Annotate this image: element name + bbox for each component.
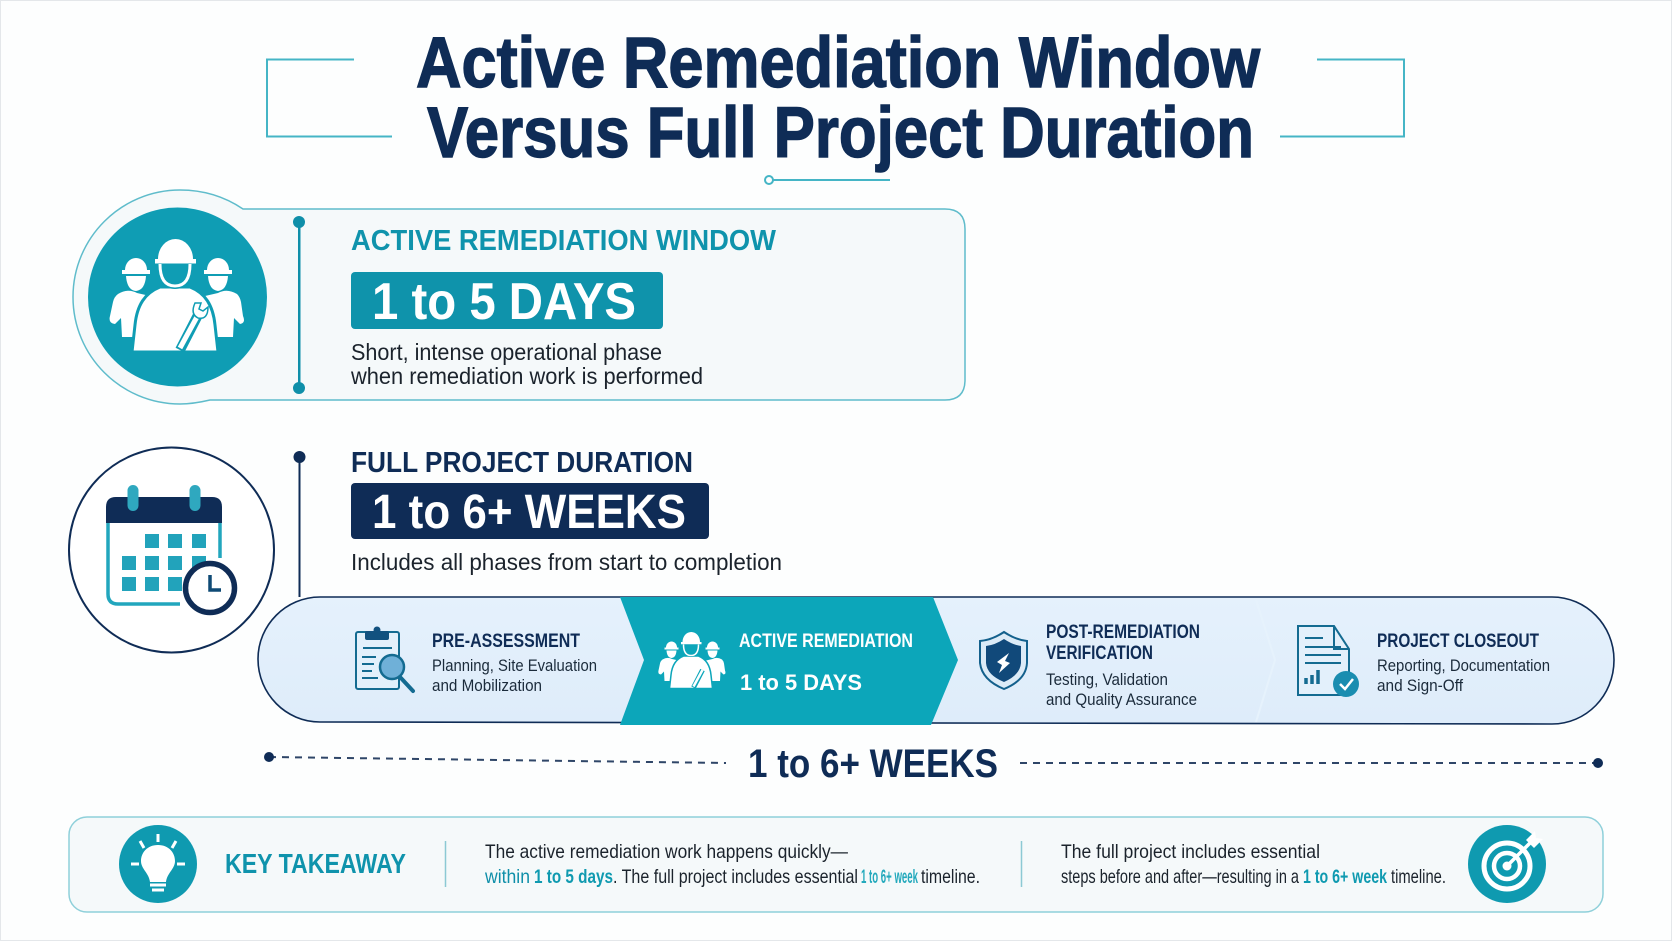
phase: project closeout: PROJECT CLOSEOUT <box>1377 631 1539 652</box>
takeaway text left: 1 to 6+ week <box>861 866 918 888</box>
icon: light bulb <box>119 825 197 903</box>
phase: pre-assessment: and Mobilization <box>432 676 542 695</box>
phase: post-remediation verification: VERIFICATION <box>1046 643 1153 664</box>
icon: workers <box>88 208 267 386</box>
takeaway text right: 1 to 6+ week <box>1303 866 1387 888</box>
takeaway text right: The full project includes essential <box>1061 841 1320 863</box>
phase: project closeout: Reporting, Documentation <box>1377 656 1550 675</box>
phase: post-remediation verification: and Quality Assurance <box>1046 690 1197 709</box>
phase: post-remediation verification: Testing, Validation <box>1046 670 1168 689</box>
icon: workers small <box>658 632 726 688</box>
duration arrow: 1 to 6+ weeks: 1 to 6+ WEEKS <box>748 742 998 786</box>
panel: phase timeline bar <box>258 597 1614 725</box>
badge: 1 to 6+ weeks: 1 to 6+ WEEKS <box>372 486 686 539</box>
icon: document with check <box>1298 626 1359 697</box>
duration arrow: 1 to 6+ weeks <box>264 742 1603 786</box>
phase: active remediation: 1 to 5 DAYS <box>740 670 862 695</box>
phase: post-remediation verification: POST-REMEDIATION <box>1046 622 1200 643</box>
badge: 1 to 5 days: 1 to 5 DAYS <box>372 273 636 331</box>
heading: ACTIVE REMEDIATION WINDOW <box>351 225 777 257</box>
takeaway text left: timeline. <box>921 866 980 888</box>
panel: active remediation window <box>73 190 965 404</box>
takeaway text left: . The full project includes essential <box>613 866 858 888</box>
description: full project: Includes all phases from start to completion <box>351 549 782 575</box>
title brackets <box>267 60 1404 184</box>
phase: active remediation <box>620 597 958 725</box>
phase: post-remediation verification <box>980 622 1200 709</box>
icon: shield <box>980 632 1027 689</box>
phase: project closeout: and Sign-Off <box>1377 676 1463 695</box>
title <box>416 24 1261 173</box>
takeaway text left: The active remediation work happens quickly— <box>485 841 848 863</box>
icon: clipboard <box>356 626 413 691</box>
description: Short, intense operational phase <box>351 339 662 365</box>
icon: target <box>1468 825 1546 903</box>
full project rule <box>294 451 306 597</box>
description <box>350 339 703 389</box>
takeaway text right: steps before and after—resulting in a <box>1061 866 1299 888</box>
heading: key takeaway: KEY TAKEAWAY <box>225 848 406 879</box>
timeline rule <box>293 216 305 394</box>
title: Versus Full Project Duration <box>427 94 1254 173</box>
heading: full project duration: FULL PROJECT DURATION <box>351 447 693 479</box>
phase: pre-assessment: Planning, Site Evaluation <box>432 656 597 675</box>
title: Active Remediation Window <box>416 24 1261 103</box>
phase: project closeout <box>1298 626 1550 697</box>
icon: calendar with clock <box>69 448 274 652</box>
takeaway text left: within <box>484 866 530 888</box>
phase: pre-assessment: PRE-ASSESSMENT <box>432 631 580 652</box>
phase: active remediation: ACTIVE REMEDIATION <box>739 631 913 652</box>
takeaway text left <box>484 841 980 888</box>
panel: key takeaway <box>69 817 1603 912</box>
takeaway text left: 1 to 5 days <box>534 866 613 888</box>
description: when remediation work is performed <box>350 363 703 389</box>
takeaway text right <box>1061 841 1446 888</box>
takeaway text right: timeline. <box>1391 866 1446 888</box>
phase: pre-assessment <box>356 626 597 695</box>
